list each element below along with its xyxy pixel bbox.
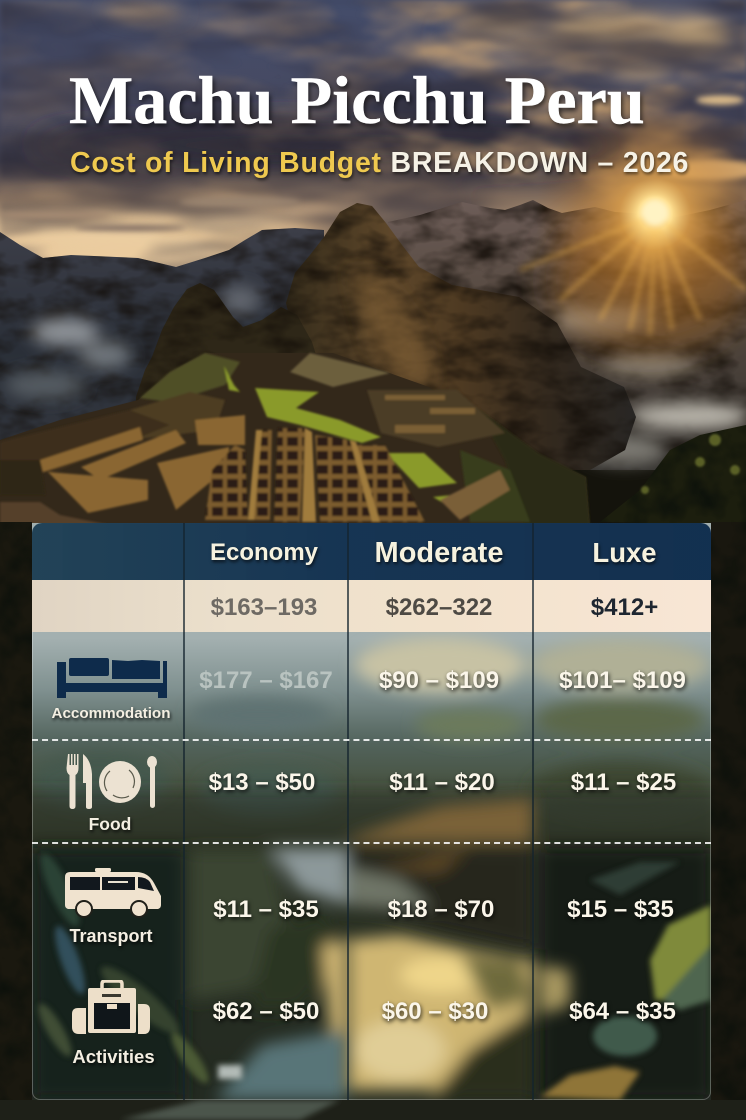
- icon: fork, knife, plate and spoon: [66, 754, 157, 809]
- ruins hill: [0, 353, 590, 525]
- values: Economy food: $13 – $50: [209, 769, 315, 796]
- total: Luxe: $412+: [591, 594, 658, 621]
- column heading: Luxe: Luxe: [592, 537, 657, 568]
- stone walls: [40, 415, 245, 513]
- row: Transport: [65, 868, 674, 948]
- back mountain range (right): [388, 200, 746, 470]
- values: Luxe food: $11 – $25: [571, 769, 676, 796]
- peak: smaller left peak: [136, 283, 330, 410]
- icon: bed: [57, 658, 167, 698]
- label: Activities: Activities: [72, 1046, 155, 1067]
- column heading: Moderate: Moderate: [375, 537, 503, 569]
- values: Moderate food: $11 – $20: [389, 769, 495, 796]
- label: Accommodation: Accommodation: [52, 705, 170, 722]
- terraced cells: [205, 428, 425, 522]
- sun and glow: [520, 94, 746, 355]
- values: Luxe transport: $15 – $35: [567, 896, 674, 923]
- values: Economy activities: $62 – $50: [213, 998, 319, 1025]
- title: Machu Picchu Peru: [69, 62, 645, 138]
- panel: budget comparison table: [32, 523, 711, 1100]
- icon: minibus: [65, 868, 161, 918]
- values: Economy transport: $11 – $35: [213, 896, 319, 923]
- values: Luxe activities: $64 – $35: [569, 998, 676, 1025]
- subtitle: Cost of Living Budget BREAKDOWN – 2026: [70, 147, 689, 179]
- total daily cost band: [32, 580, 711, 632]
- row: Food: [66, 754, 678, 834]
- total: Economy: $163–193: [211, 594, 317, 621]
- table header band: [32, 523, 711, 580]
- values: Moderate accommodation: $90 – $109: [379, 667, 499, 694]
- icon: luggage: [72, 980, 150, 1034]
- label: Transport: Transport: [69, 926, 152, 946]
- peak: Huayna Picchu: [286, 203, 636, 470]
- left mountain range: [0, 228, 324, 470]
- river reflection: [348, 935, 570, 1100]
- total: Moderate: $262–322: [386, 594, 492, 621]
- label: Food: Food: [89, 814, 131, 834]
- jungle and river scene behind table: [32, 523, 711, 1100]
- green lawns: [224, 366, 471, 508]
- values: Economy accommodation: $177 – $167: [199, 667, 333, 694]
- foliage right: [600, 425, 746, 525]
- row: Activities: [72, 980, 676, 1067]
- row: Accommodation: [52, 658, 689, 722]
- column heading: Economy: Economy: [210, 539, 318, 566]
- values: Luxe accommodation: $101– $109: [559, 667, 686, 694]
- values: Moderate activities: $60 – $30: [382, 998, 488, 1025]
- values: Moderate transport: $18 – $70: [388, 896, 494, 923]
